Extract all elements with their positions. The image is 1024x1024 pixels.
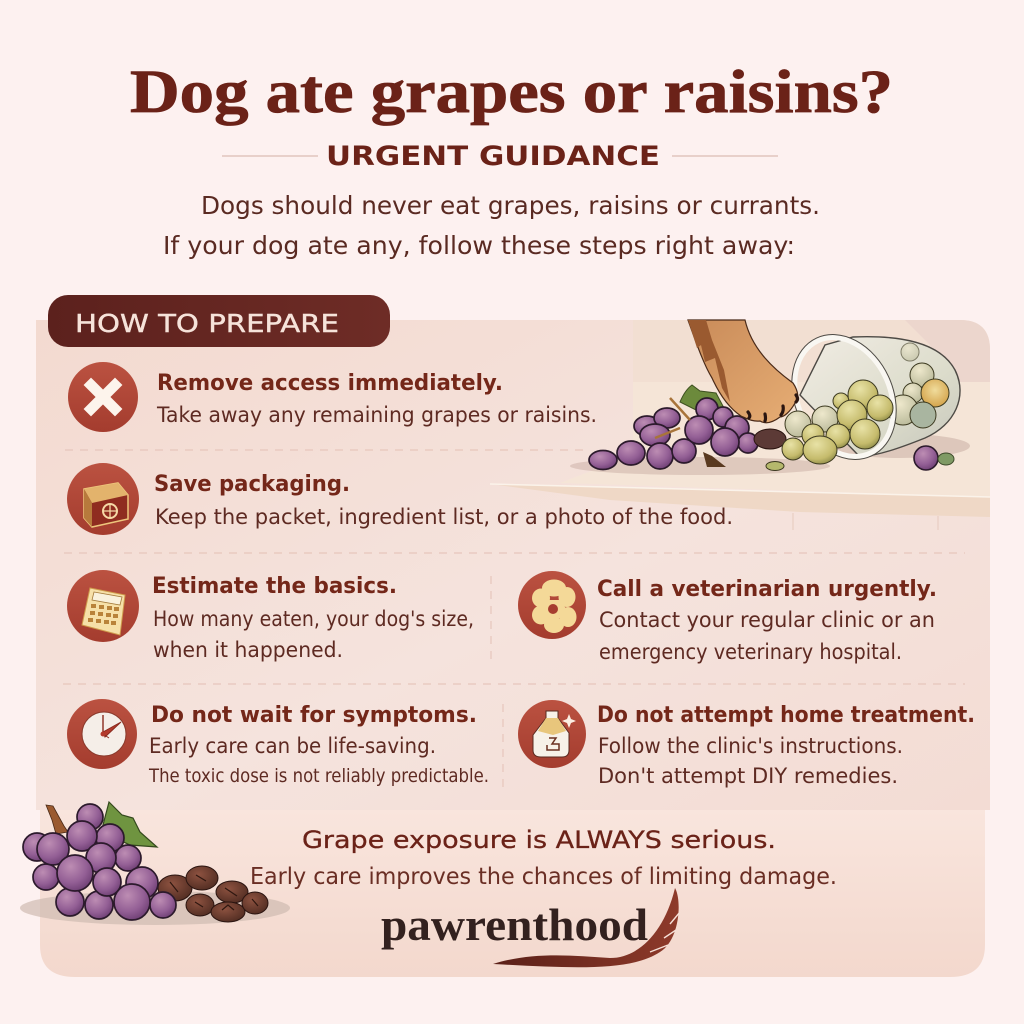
loose grapes (914, 446, 938, 470)
raisins (158, 866, 268, 922)
dog paw (688, 320, 798, 423)
panel: footer (40, 810, 985, 977)
step 3: estimate the basics: when it happened. (153, 638, 343, 662)
shadow (570, 457, 830, 475)
step 4: call a veterinarian (518, 571, 937, 664)
grapes on counter (589, 398, 758, 470)
step 2: save packaging (67, 463, 733, 535)
footer message: Grape exposure is ALWAYS serious. (302, 826, 776, 854)
step 6: no home treatment: Follow the clinic's instructions. (598, 734, 903, 758)
step 4: call a veterinarian: emergency veterinary hospital. (599, 640, 902, 664)
stem (655, 398, 690, 438)
step 1: remove access: Take away any remaining grapes or raisins. (156, 403, 597, 427)
footer message (250, 826, 837, 890)
step 3: estimate the basics: Estimate the basics. (152, 574, 397, 599)
step 3: estimate the basics: How many eaten, your dog's size, (153, 607, 474, 631)
icon: cross (68, 362, 138, 432)
step 6: no home treatment (518, 700, 975, 788)
step 5: do not wait (67, 699, 489, 787)
icon: bottle (518, 700, 586, 768)
step 1: remove access (68, 362, 597, 432)
grape bunch (23, 804, 176, 920)
intro text: If your dog ate any, follow these steps right away: (163, 231, 795, 260)
icon: clock (67, 699, 137, 769)
icon: calculator (67, 570, 139, 642)
illustration: counter with spilled jar and paw (490, 317, 990, 530)
grapes in jar (888, 343, 949, 428)
intro text: Dogs should never eat grapes, raisins or currants. (201, 191, 820, 220)
panel: steps (36, 320, 990, 810)
step 1: remove access: Remove access immediately. (157, 371, 503, 396)
spilled green grapes (766, 380, 893, 470)
illustration: grapes and raisins (20, 802, 290, 925)
title: Dog ate grapes or raisins? (130, 59, 893, 126)
tab: how to prepare: HOW TO PREPARE (75, 309, 339, 338)
logo: pawrenthood: pawrenthood (381, 899, 648, 950)
jar (800, 337, 960, 457)
icon: flower (518, 571, 586, 639)
step 5: do not wait: Do not wait for symptoms. (151, 703, 477, 728)
counter front (490, 484, 990, 517)
leaf (680, 385, 724, 412)
step 3: estimate the basics (67, 570, 474, 662)
logo: pawrenthood (381, 888, 680, 967)
footer message: Early care improves the chances of limiting damage. (250, 864, 837, 890)
intro text (163, 191, 820, 260)
jar rim (776, 321, 912, 473)
step 4: call a veterinarian: Contact your regular clinic or an (599, 608, 935, 632)
leaf (103, 802, 157, 847)
step 6: no home treatment: Don't attempt DIY remedies. (598, 764, 898, 788)
counter top (560, 382, 990, 497)
stem (46, 805, 68, 834)
wall (633, 320, 990, 382)
step 6: no home treatment: Do not attempt home treatment. (597, 703, 975, 728)
step 5: do not wait: Early care can be life-saving. (149, 734, 436, 758)
icon: package (67, 463, 139, 535)
step 5: do not wait: The toxic dose is not reliably predictable. (148, 765, 489, 787)
tab: how to prepare (48, 295, 390, 347)
subtitle: urgent guidance: URGENT GUIDANCE (326, 141, 660, 172)
step 4: call a veterinarian: Call a veterinarian urgently. (597, 577, 937, 602)
crushed raisin (754, 429, 786, 449)
step 2: save packaging: Keep the packet, ingredient list, or a photo of the food. (155, 505, 733, 529)
step 2: save packaging: Save packaging. (154, 472, 350, 497)
